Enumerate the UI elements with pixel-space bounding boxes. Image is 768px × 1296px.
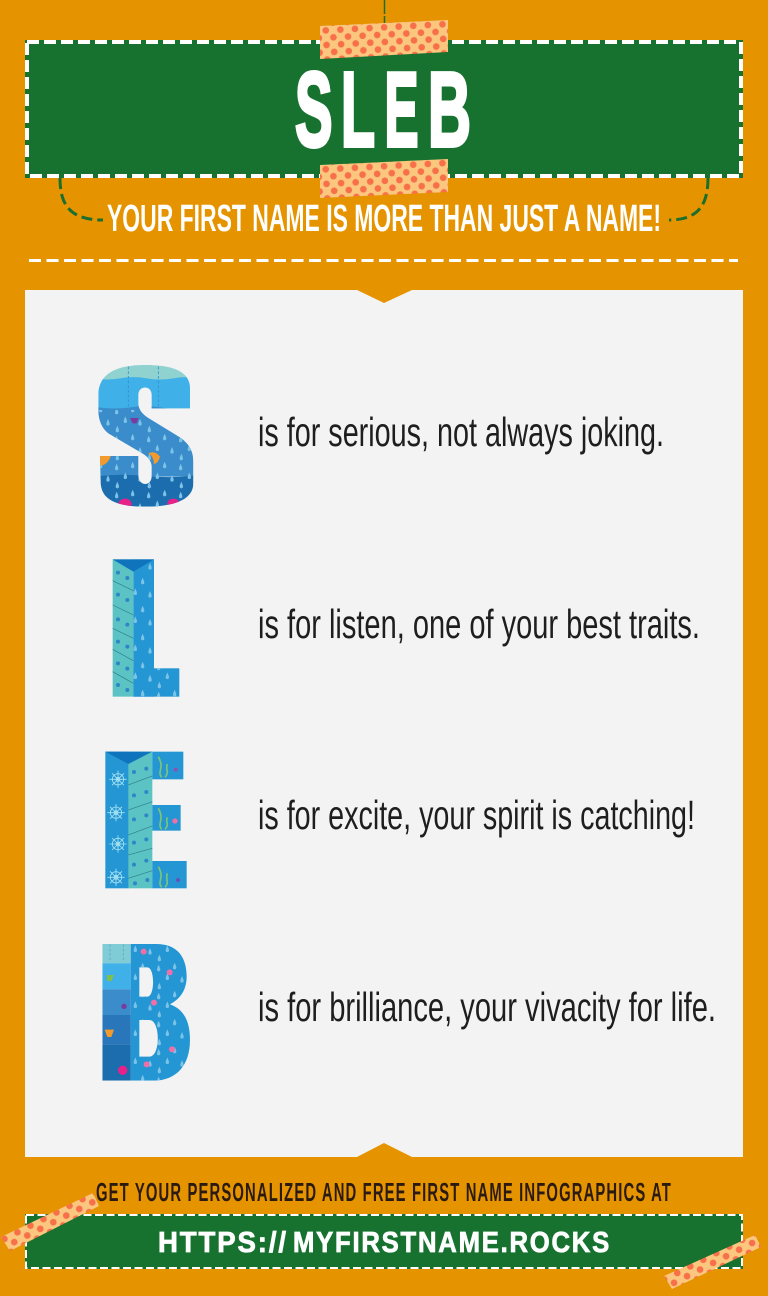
title: S <box>295 51 332 169</box>
right connector <box>669 178 708 220</box>
title <box>295 51 471 169</box>
tape: footer left <box>1 1193 99 1251</box>
tape: banner bottom <box>320 159 448 198</box>
footer URL: MYFIRSTNAME.ROCKS <box>293 1227 611 1259</box>
letter S row <box>93 360 664 510</box>
icon: letter L <box>113 559 179 697</box>
icon: letter S <box>98 365 194 507</box>
tape: footer right <box>664 1235 761 1289</box>
icon: letter B <box>102 942 194 1083</box>
footer URL: HTTPS:// <box>158 1227 288 1259</box>
footer banner <box>25 1214 743 1269</box>
letter E row <box>105 752 695 888</box>
hanging string <box>384 0 386 24</box>
title banner <box>25 40 743 178</box>
main panel <box>25 290 743 1157</box>
letter B row <box>102 942 716 1083</box>
title: B <box>428 51 471 169</box>
title: L <box>341 51 375 169</box>
left connector <box>60 178 103 220</box>
letter L row <box>113 559 700 697</box>
icon: letter E <box>105 752 187 888</box>
tape: banner top <box>320 20 448 59</box>
footer URL <box>158 1227 611 1259</box>
title: E <box>384 51 418 169</box>
